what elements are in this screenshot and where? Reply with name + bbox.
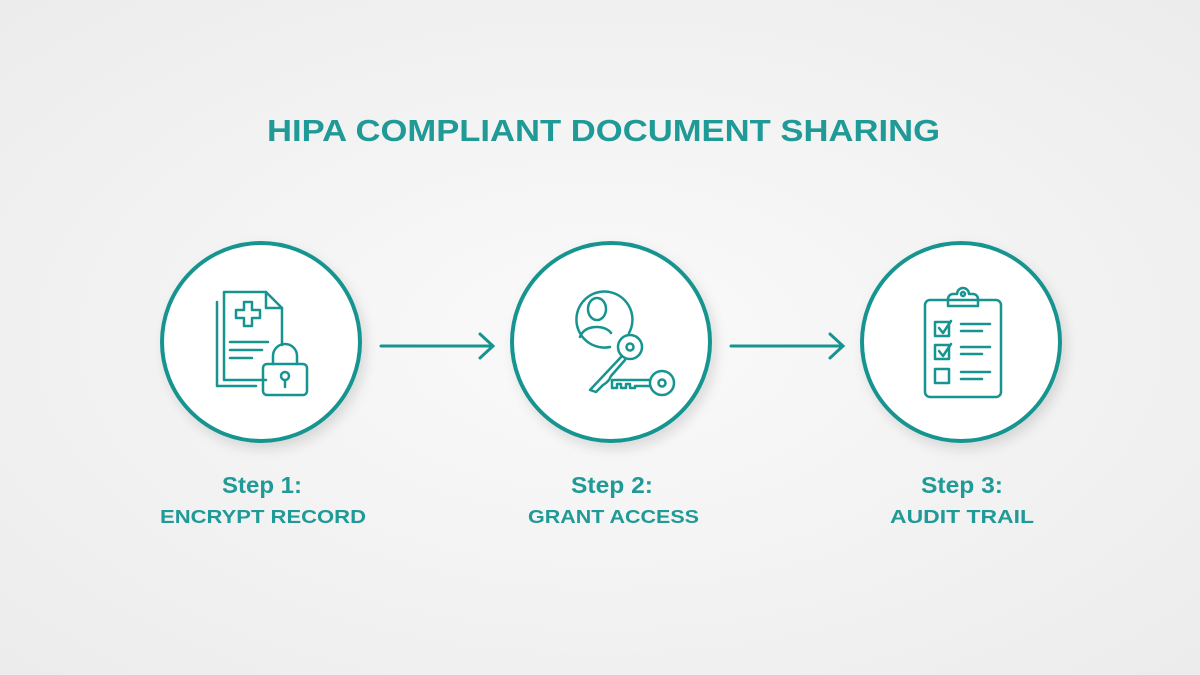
icon: clipboard checklist [925, 288, 1001, 397]
label: step 2: GRANT ACCESS [528, 506, 699, 527]
label: step 1: ENCRYPT RECORD [160, 506, 366, 527]
title: HIPA COMPLIANT DOCUMENT SHARING [267, 113, 940, 148]
label: step 1: Step 1: [222, 472, 302, 498]
arrow 1 [381, 334, 493, 358]
arrow 2 [731, 334, 843, 358]
step 3: circle with clipboard checklist icon [862, 243, 1060, 441]
step 1: circle with document lock icon [162, 243, 360, 441]
label: step 1 [160, 472, 366, 527]
step 2: circle with user and keys icon [512, 243, 710, 441]
label: step 2 [528, 472, 699, 527]
label: step 3: Step 3: [921, 472, 1003, 498]
icon: user with keys [576, 292, 674, 395]
icon: medical document with lock [217, 292, 307, 395]
label: step 2: Step 2: [571, 472, 653, 498]
label: step 3: AUDIT TRAIL [890, 506, 1034, 527]
label: step 3 [890, 472, 1034, 527]
